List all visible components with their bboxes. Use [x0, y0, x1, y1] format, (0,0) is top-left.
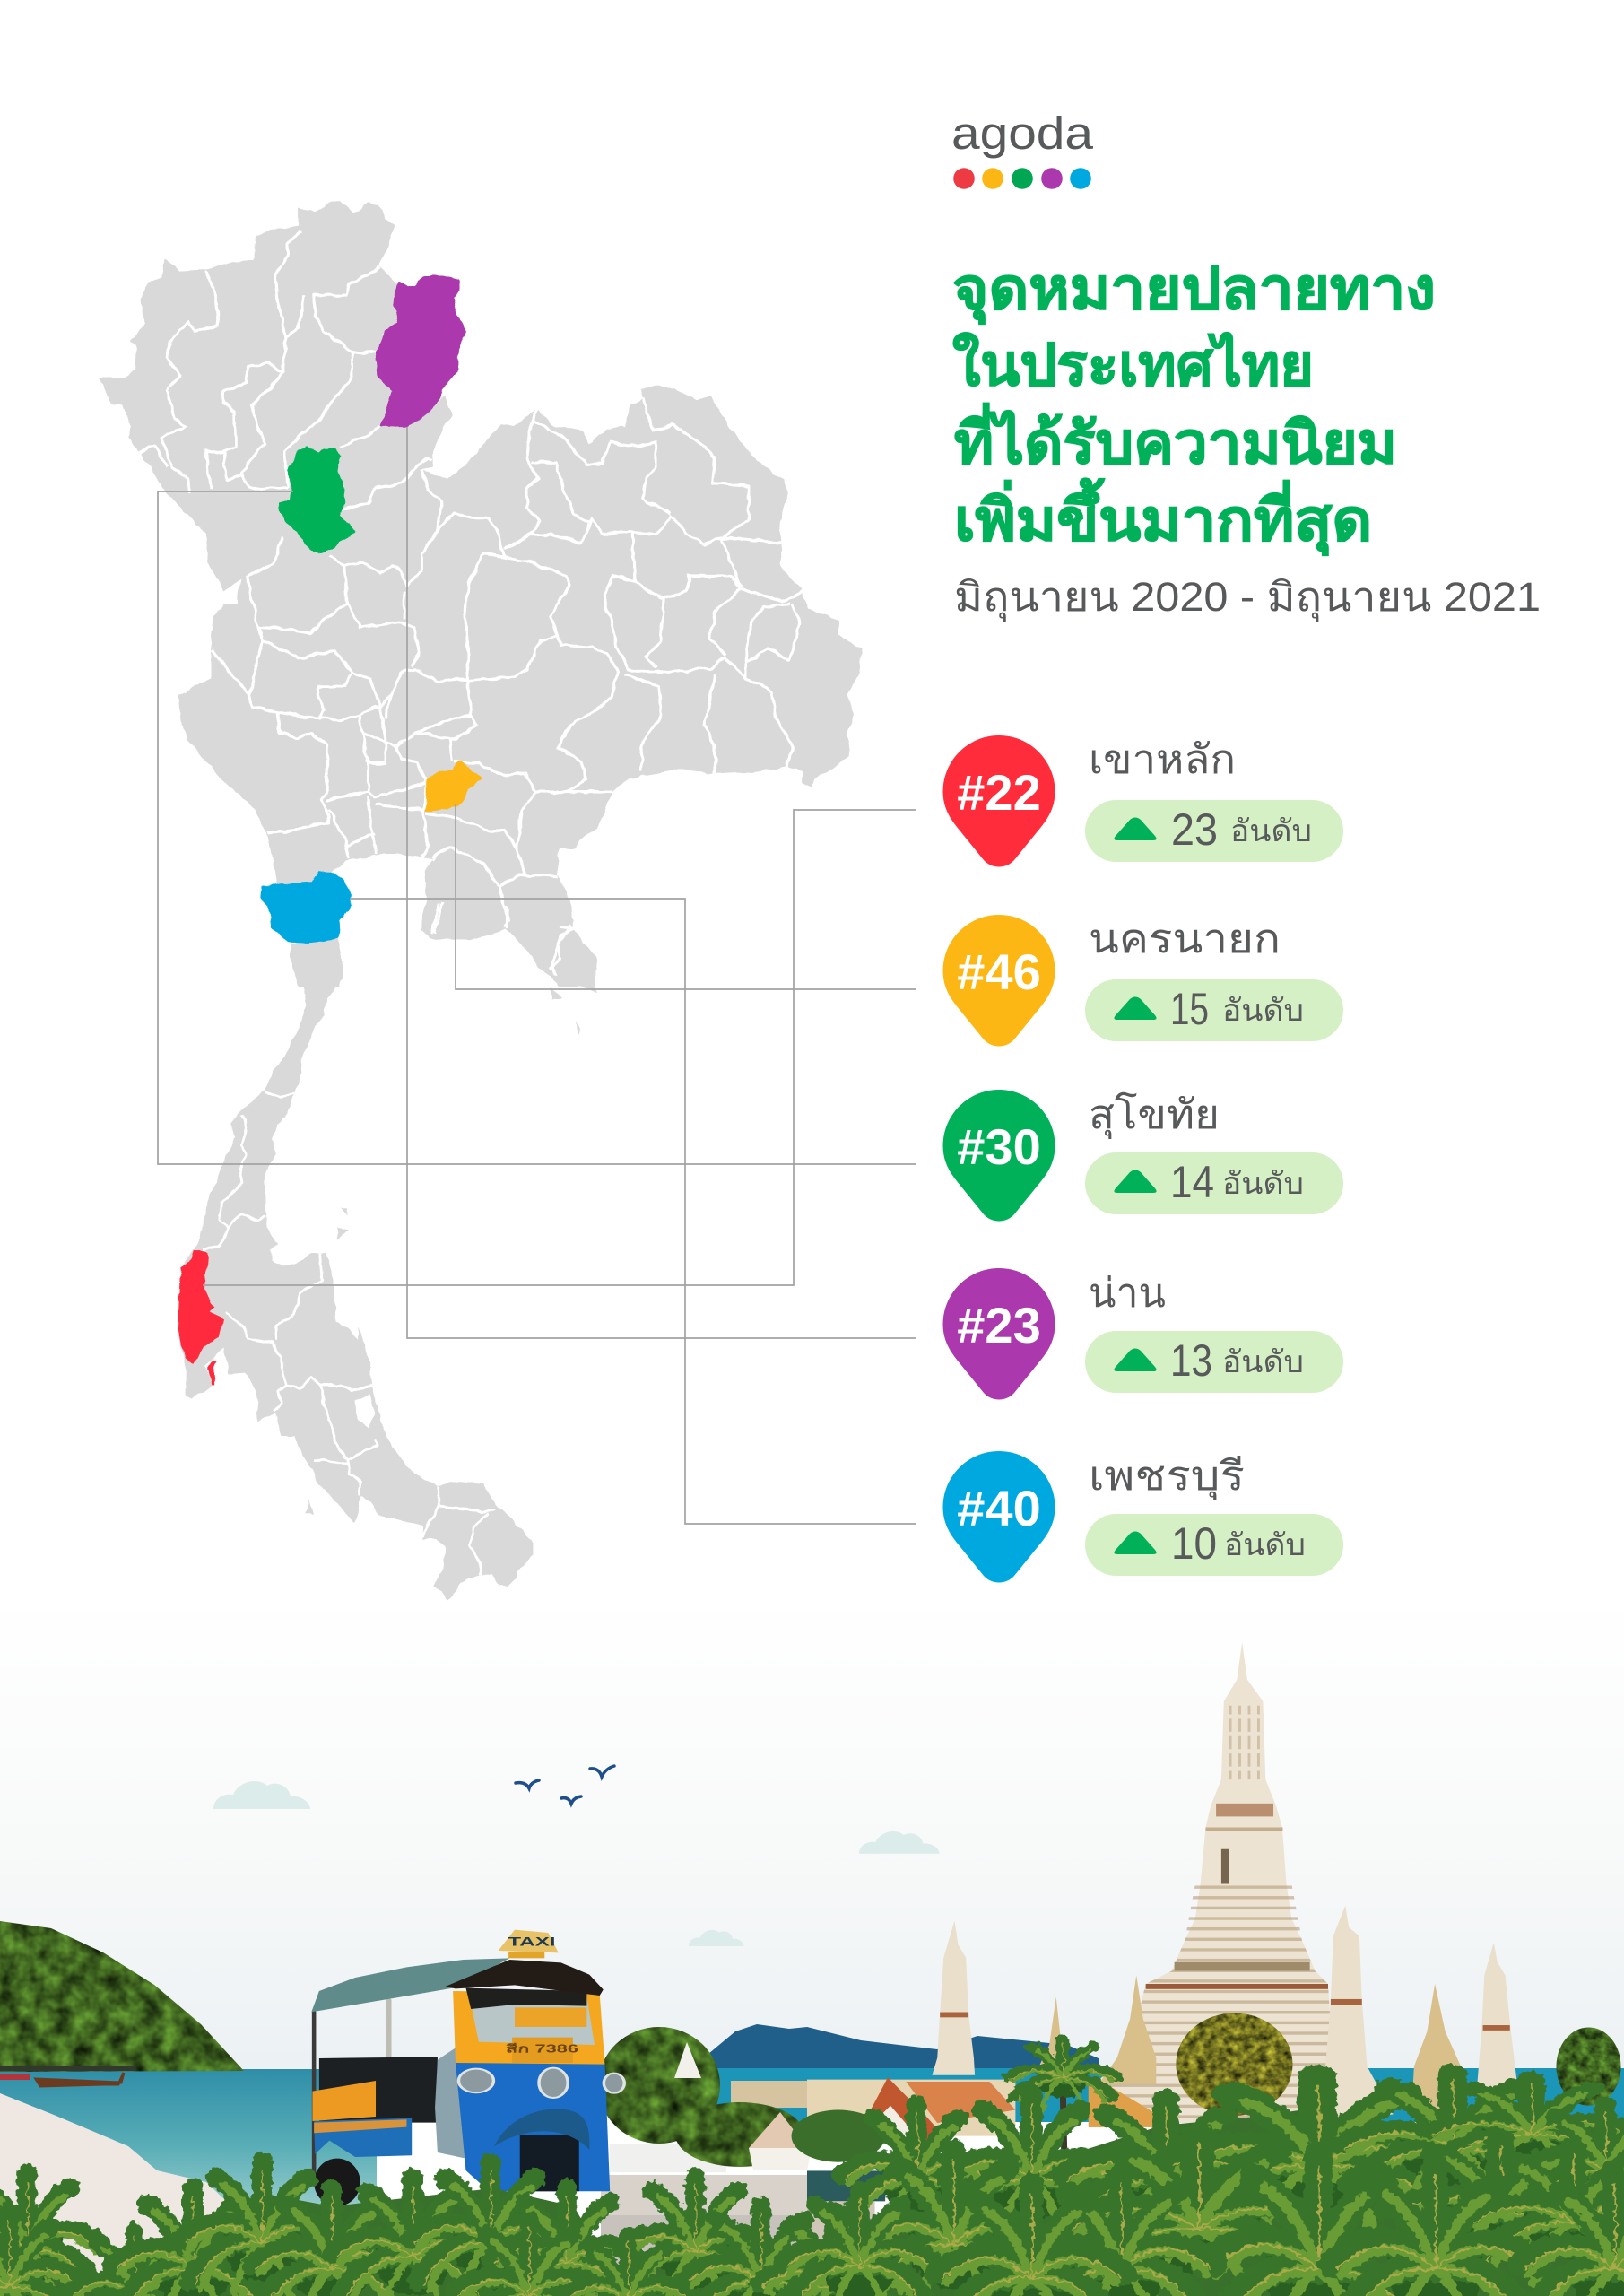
rank change pill: อันดับ	[1222, 1167, 1304, 1201]
ranking row: Phetchaburi	[943, 1451, 1343, 1582]
pin #23: #23	[957, 1297, 1041, 1353]
prang details	[1146, 1804, 1328, 1989]
pin #46	[943, 915, 1055, 1046]
pin #22: #22	[957, 764, 1041, 821]
taxi sign: TAXI	[508, 1935, 555, 1949]
logo dots	[953, 168, 1091, 189]
ranking row: Khao Lak	[943, 735, 1343, 866]
prang upper niches	[1223, 1706, 1264, 1779]
license plate	[506, 2038, 578, 2063]
side prangs	[932, 1906, 1518, 2114]
map of Thailand	[100, 200, 862, 1601]
title: เพิ่มขึ้นมากที่สุด	[954, 478, 1372, 556]
palm trees	[0, 2039, 1624, 2296]
rear body	[314, 2118, 412, 2157]
rear cabin	[319, 2057, 438, 2123]
gold pointed spires	[1039, 1975, 1461, 2114]
rear posts	[314, 2000, 388, 2182]
taxi sign	[499, 1930, 559, 1958]
roof	[446, 1960, 604, 1996]
central trees and buildings	[598, 2027, 897, 2296]
map: southern provinces	[178, 897, 596, 1600]
map: northern and central provinces	[100, 200, 862, 987]
name: นครนายก	[1089, 916, 1281, 961]
rank change pill	[1085, 979, 1343, 1041]
name: สุโขทัย	[1089, 1091, 1220, 1139]
side prang bands	[940, 1999, 1510, 2031]
rank change pill: 13	[1170, 1335, 1212, 1386]
passenger	[435, 2048, 465, 2159]
name: เขาหลัก	[1089, 736, 1236, 782]
ranking row: Nakhon Nayok	[943, 915, 1343, 1046]
province: Sukhothai (green)	[279, 447, 355, 552]
license plate: สีก 7386	[506, 2042, 578, 2055]
windshield strip	[515, 2007, 586, 2027]
rank change pill: 10	[1171, 1518, 1217, 1569]
birds	[516, 1766, 614, 1804]
rear orange sign	[312, 2081, 376, 2121]
Wat Arun temple	[792, 1643, 1621, 2288]
pin #23	[943, 1268, 1055, 1399]
front lower body	[456, 2063, 610, 2191]
red boat	[0, 2074, 30, 2080]
pin #22	[943, 735, 1055, 866]
map: province borders south	[204, 904, 571, 1575]
dark tree	[598, 2027, 720, 2144]
rear wheel	[314, 2159, 360, 2206]
headlights	[458, 2068, 624, 2098]
rear stripe	[314, 2119, 406, 2133]
province: Khao Lak (red)	[178, 1249, 222, 1385]
sea	[0, 2069, 377, 2222]
long-tail boat	[36, 2073, 124, 2086]
rank change pill: อันดับ	[1222, 994, 1304, 1028]
pin #40	[943, 1451, 1055, 1582]
title: จุดหมายปลายทาง	[952, 257, 1436, 325]
far buildings and roofs	[792, 2077, 1156, 2288]
rank change pill	[1085, 1152, 1343, 1214]
canopy	[311, 1958, 509, 2012]
province: Phetchaburi (blue)	[261, 872, 350, 942]
forest hill	[0, 1921, 244, 2072]
rank change pill: อันดับ	[1224, 1528, 1306, 1562]
pin #46: #46	[957, 944, 1041, 1000]
rank change pill	[1085, 1514, 1343, 1576]
map: province borders north	[139, 230, 803, 975]
front fender	[494, 2109, 589, 2150]
pin #30	[943, 1090, 1055, 1222]
title: ที่ได้รับความนิยม	[954, 403, 1397, 475]
bottom scene: beach, tuk-tuk, temple, palms	[0, 1643, 1624, 2296]
rank change pill: อันดับ	[1222, 1345, 1304, 1379]
ranking row: Sukhothai	[943, 1090, 1343, 1222]
green tree	[675, 2102, 804, 2167]
sand beach	[0, 2093, 269, 2296]
tall palm trunk	[1063, 2079, 1067, 2296]
name: เพชรบุรี	[1089, 1453, 1245, 1500]
front upper body	[453, 1991, 604, 2065]
pin #30: #30	[957, 1118, 1041, 1175]
connector lines	[158, 427, 916, 1524]
rank change pill: 23	[1171, 804, 1218, 855]
cab shadow	[465, 1988, 586, 2009]
prang stripes	[1099, 1884, 1394, 2123]
right trees	[1556, 2027, 1621, 2106]
rank change pill	[1085, 800, 1343, 862]
front wheel	[520, 2135, 579, 2191]
tree in front of temple	[1176, 2013, 1292, 2116]
logo wordmark: agoda	[951, 108, 1094, 159]
rank change pill: 15	[1170, 984, 1209, 1034]
ranking row: Nan	[943, 1268, 1343, 1399]
pin #40: #40	[957, 1480, 1041, 1536]
background sky gradient	[0, 1596, 1624, 2099]
far mountain	[688, 2024, 1099, 2076]
name: น่าน	[1089, 1270, 1166, 1316]
clouds	[213, 1781, 940, 1946]
province: Nakhon Nayok (yellow)	[427, 761, 481, 810]
main prang	[1099, 1643, 1394, 2123]
rank change pill: 14	[1170, 1157, 1214, 1207]
tuk-tuk	[311, 1930, 624, 2206]
agoda logo	[951, 108, 1094, 189]
palm tree undergrowth	[0, 2108, 1624, 2296]
title	[952, 257, 1436, 556]
windshield	[468, 1991, 595, 2045]
rank change pill: อันดับ	[1230, 814, 1312, 848]
rank change pill	[1085, 1331, 1343, 1393]
sea band	[682, 2068, 1624, 2122]
subtitle: date range: มิถุนายน 2020 - มิถุนายน 2021	[954, 574, 1541, 622]
title: ในประเทศไทย	[952, 332, 1314, 397]
province: Nan (purple)	[376, 275, 465, 427]
